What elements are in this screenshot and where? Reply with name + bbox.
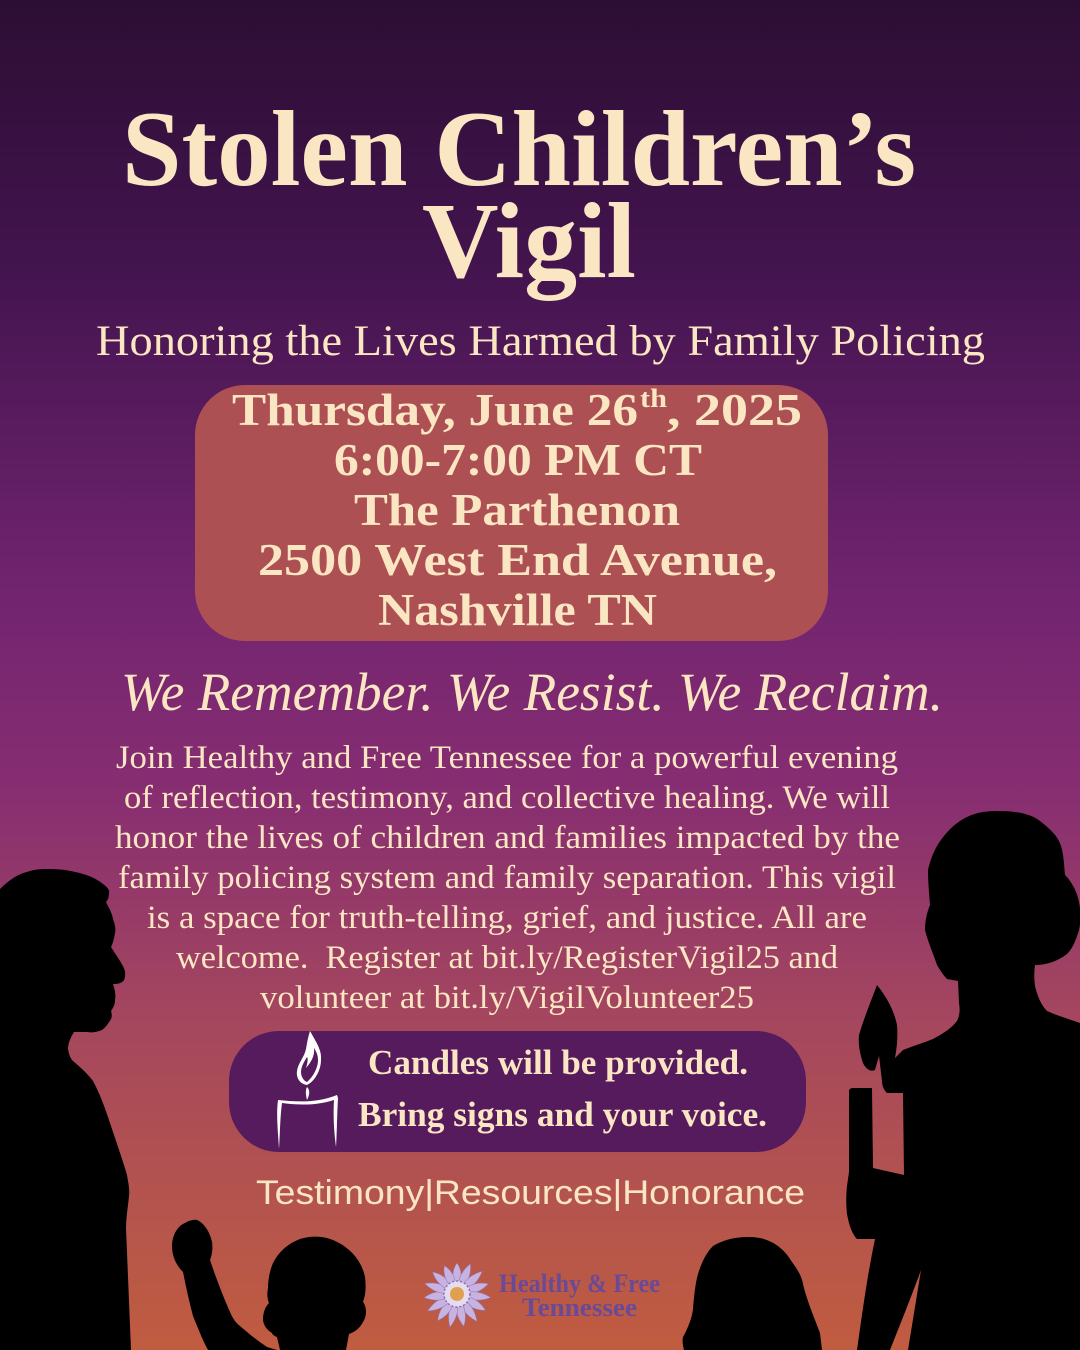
subtitle: Honoring the Lives Harmed by Family Policing [96, 318, 985, 365]
silhouette: woman holding candle [846, 811, 1080, 1350]
program items: Testimony|Resources|Honorance [256, 1174, 805, 1212]
tagline: We Remember. We Resist. We Reclaim. [121, 662, 943, 722]
description text: honor the lives of children and families impacted by the [115, 820, 900, 856]
silhouette: child with raised fist [172, 1220, 366, 1350]
title: Stolen Children’s [122, 90, 916, 209]
panel: candles note [229, 1031, 806, 1152]
logo wordmark [499, 1269, 660, 1322]
description text: volunteer at bit.ly/VigilVolunteer25 [260, 980, 754, 1016]
description text: of reflection, testimony, and collective healing. We will [124, 780, 890, 816]
note text: Candles will be provided. [368, 1043, 748, 1082]
logo: Healthy and Free Tennessee [423, 1262, 660, 1328]
description text: welcome. Register at bit.ly/RegisterVigil25 and [176, 940, 839, 976]
title [122, 90, 916, 301]
event date [232, 384, 802, 435]
event venue: The Parthenon [354, 485, 680, 535]
silhouette: man [0, 869, 131, 1350]
event date: Thursday, June 26 [232, 385, 638, 435]
silhouette: girl [683, 1237, 822, 1350]
logo wordmark: Tennessee [522, 1293, 637, 1322]
event date: , 2025 [667, 385, 802, 435]
description text: family policing system and family separation. This vigil [118, 860, 896, 896]
event address: 2500 West End Avenue, [258, 535, 777, 585]
description text: is a space for truth-telling, grief, and justice. All are [147, 900, 867, 936]
icon: candle [277, 1031, 338, 1149]
event address: Nashville TN [378, 585, 657, 635]
note text: Bring signs and your voice. [358, 1095, 767, 1134]
event address [258, 535, 777, 635]
note text [358, 1043, 767, 1134]
event date: th [640, 384, 668, 413]
description text [115, 740, 900, 1016]
icon: flower [423, 1262, 491, 1328]
title: Vigil [422, 182, 636, 301]
description text: Join Healthy and Free Tennessee for a powerful evening [116, 740, 898, 776]
logo wordmark: Healthy & Free [499, 1269, 660, 1298]
panel: event details [195, 384, 828, 641]
event time: 6:00-7:00 PM CT [334, 435, 702, 485]
